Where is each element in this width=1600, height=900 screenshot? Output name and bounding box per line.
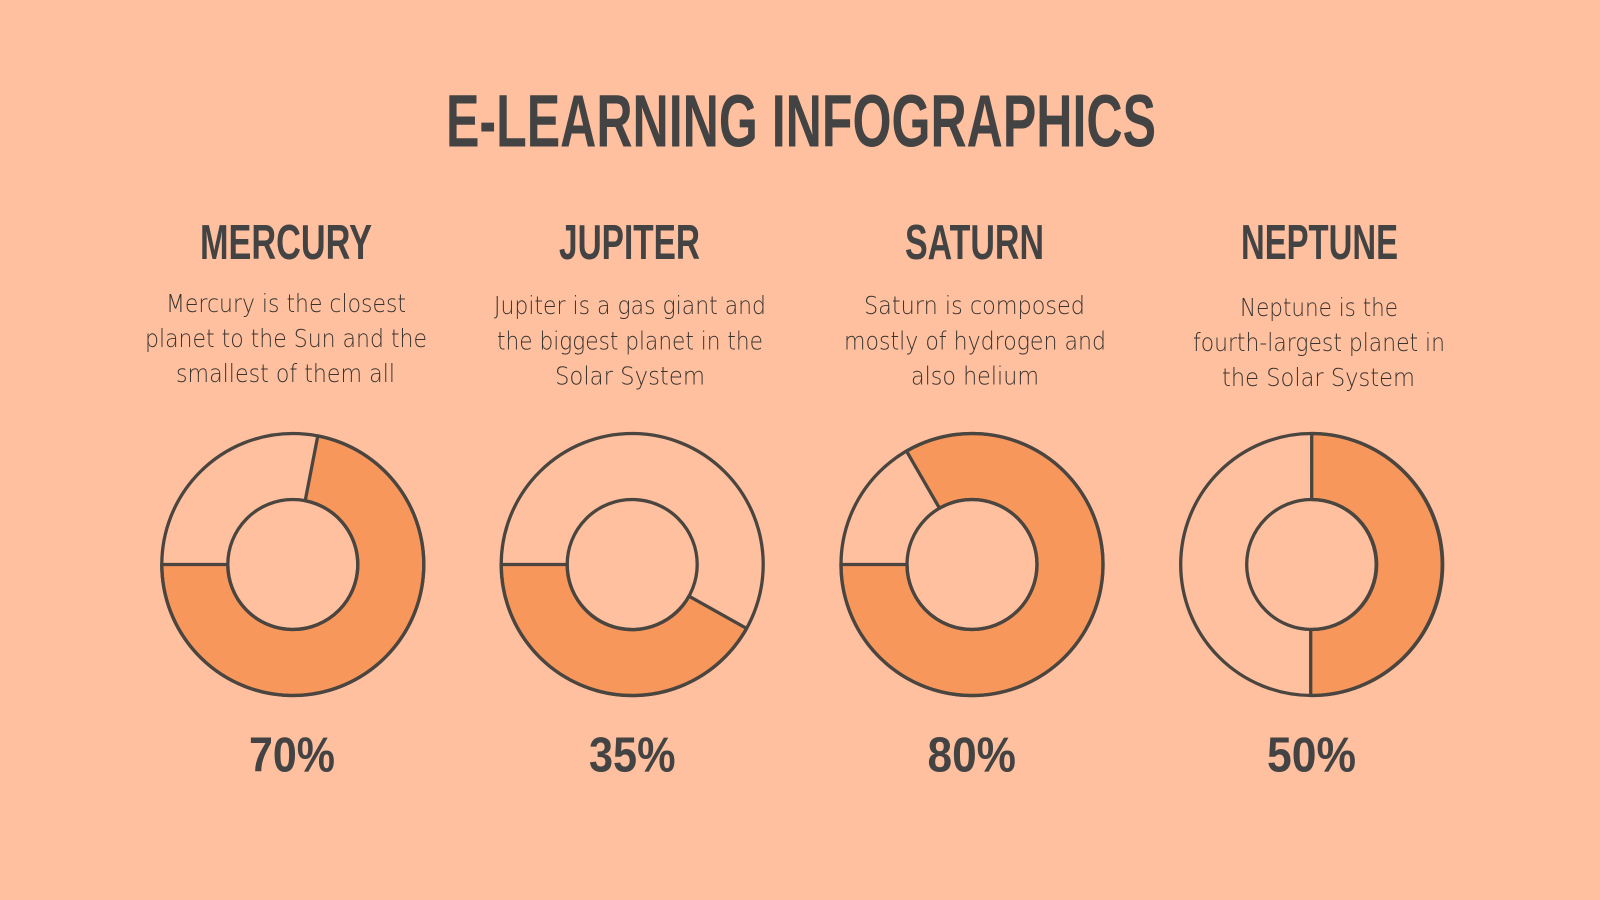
- panel: Saturn: [841, 216, 1106, 782]
- description: Neptune: the Solar System: [1222, 363, 1415, 392]
- description: Saturn: mostly of hydrogen and: [844, 326, 1106, 356]
- heading: Saturn: SATURN: [905, 216, 1044, 270]
- title: E-LEARNING INFOGRAPHICS: [446, 80, 1156, 162]
- value: Saturn: 80%: [928, 728, 1016, 782]
- description: Saturn: Saturn is composed: [864, 291, 1085, 320]
- description: Jupiter: the biggest planet in the: [497, 326, 763, 356]
- description: Mercury: [145, 289, 427, 388]
- donut chart: Saturn 80%: [841, 434, 1103, 696]
- heading: Neptune: NEPTUNE: [1241, 216, 1398, 270]
- description: Mercury: planet to the Sun and the: [145, 324, 427, 353]
- description: Jupiter: Jupiter is a gas giant and: [494, 291, 766, 320]
- description: Jupiter: Solar System: [555, 362, 705, 390]
- panel: Mercury: [145, 216, 427, 782]
- description: Neptune: Neptune is the: [1240, 293, 1398, 322]
- description: Saturn: also helium: [911, 362, 1039, 390]
- value: Jupiter: 35%: [589, 728, 676, 782]
- description: Saturn: [844, 291, 1106, 390]
- description: Jupiter: [494, 291, 766, 390]
- donut chart: Jupiter 35%: [501, 434, 763, 696]
- donut chart: Neptune 50%: [1181, 434, 1443, 696]
- value: Neptune: 50%: [1267, 728, 1356, 782]
- heading: Jupiter: JUPITER: [559, 216, 700, 270]
- description: Mercury: smallest of them all: [176, 359, 395, 388]
- panel: Jupiter: [494, 216, 766, 782]
- heading: Mercury: MERCURY: [200, 216, 372, 270]
- panel: Neptune: [1181, 216, 1445, 782]
- description: Mercury: Mercury is the closest: [166, 289, 406, 318]
- donut chart: Mercury 70%: [162, 434, 424, 696]
- description: Neptune: [1193, 293, 1445, 392]
- description: Neptune: fourth-largest planet in: [1193, 328, 1445, 357]
- value: Mercury: 70%: [249, 728, 335, 782]
